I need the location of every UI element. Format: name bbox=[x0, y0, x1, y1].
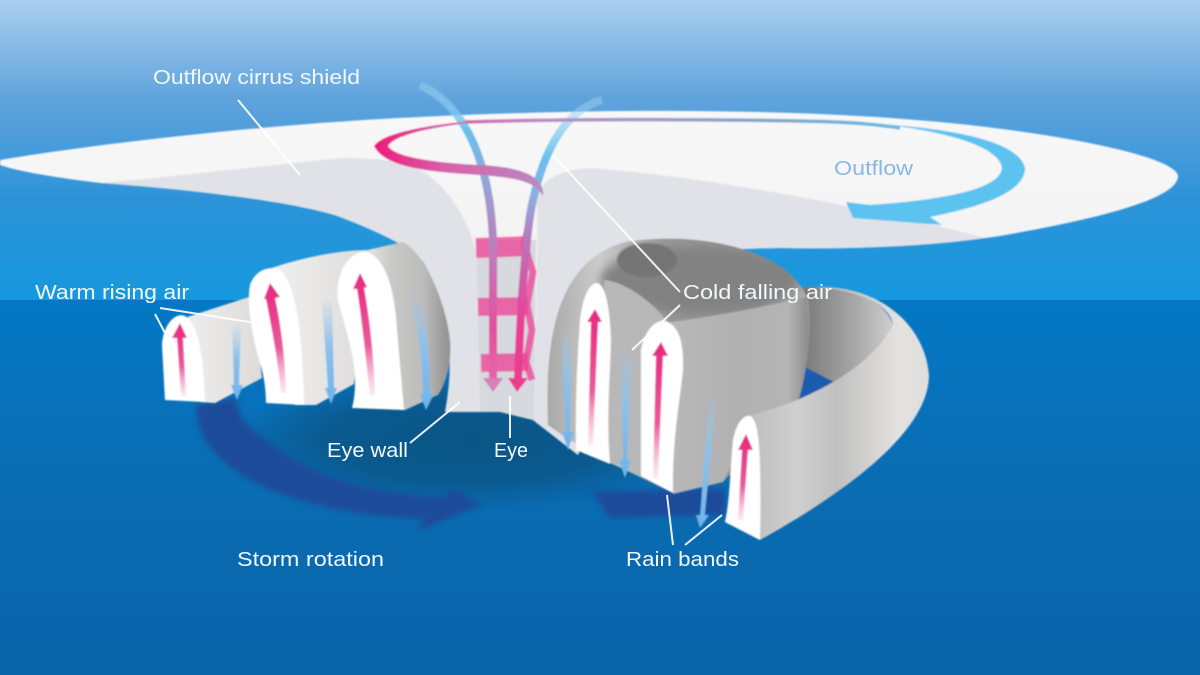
panel: right rain bands, outer ring bbox=[548, 239, 929, 540]
sea background bbox=[0, 300, 1200, 675]
dark oval hole bbox=[617, 243, 677, 277]
label: outflow: Outflow bbox=[834, 157, 913, 180]
leader lines bbox=[155, 100, 722, 545]
arrow: outflow bbox=[846, 124, 1025, 225]
back ring bbox=[548, 239, 809, 493]
pink bands bbox=[476, 215, 533, 380]
arch 3 bbox=[725, 416, 761, 540]
dark inner surface bbox=[600, 247, 800, 313]
label: outflow cirrus shield: Outflow cirrus shield bbox=[153, 66, 360, 89]
icons: cold falling air arrows bbox=[231, 295, 716, 528]
panel: outflow cirrus shield bbox=[0, 111, 1178, 455]
panel: right rain band arches bbox=[576, 283, 761, 540]
label: warm rising air: Warm rising air bbox=[35, 281, 189, 304]
arch B bbox=[249, 268, 304, 405]
outflow spiral lower loop bbox=[374, 121, 543, 196]
arch C bbox=[338, 252, 404, 410]
label: eye wall: Eye wall bbox=[327, 439, 408, 462]
shadow beneath eye bbox=[230, 370, 710, 510]
arrow: storm rotation bbox=[197, 398, 725, 532]
panel: left rain bands bbox=[162, 242, 450, 410]
body B bbox=[272, 250, 368, 405]
body A bbox=[178, 296, 262, 403]
funnel shading, right bbox=[533, 168, 985, 455]
arrowheads at eye base bbox=[483, 378, 528, 392]
body C bbox=[360, 242, 450, 410]
outer ring inner surface bbox=[800, 287, 893, 402]
descending left stream bbox=[420, 85, 493, 380]
outer band bbox=[725, 287, 929, 540]
icons: warm rising air arrows bbox=[172, 273, 753, 520]
sea gap bbox=[790, 367, 838, 410]
arrow: eye descending spirals bbox=[420, 85, 900, 380]
sky background bbox=[0, 0, 1200, 301]
label: eye: Eye bbox=[494, 439, 528, 462]
arch A bbox=[162, 315, 205, 402]
funnel shading, left bbox=[100, 158, 480, 412]
body of band 2 bbox=[670, 297, 809, 494]
label: rain bands: Rain bands bbox=[626, 548, 739, 571]
label: storm rotation: Storm rotation bbox=[237, 548, 384, 571]
arch 1 bbox=[576, 283, 611, 464]
arch 2 bbox=[641, 321, 683, 493]
body between bands 1 and 2 bbox=[604, 280, 668, 478]
label: cold falling air: Cold falling air bbox=[683, 281, 832, 304]
eye inner wall bbox=[476, 240, 536, 420]
thin top of outflow spiral bbox=[465, 120, 900, 128]
descending right stream bbox=[518, 100, 602, 380]
